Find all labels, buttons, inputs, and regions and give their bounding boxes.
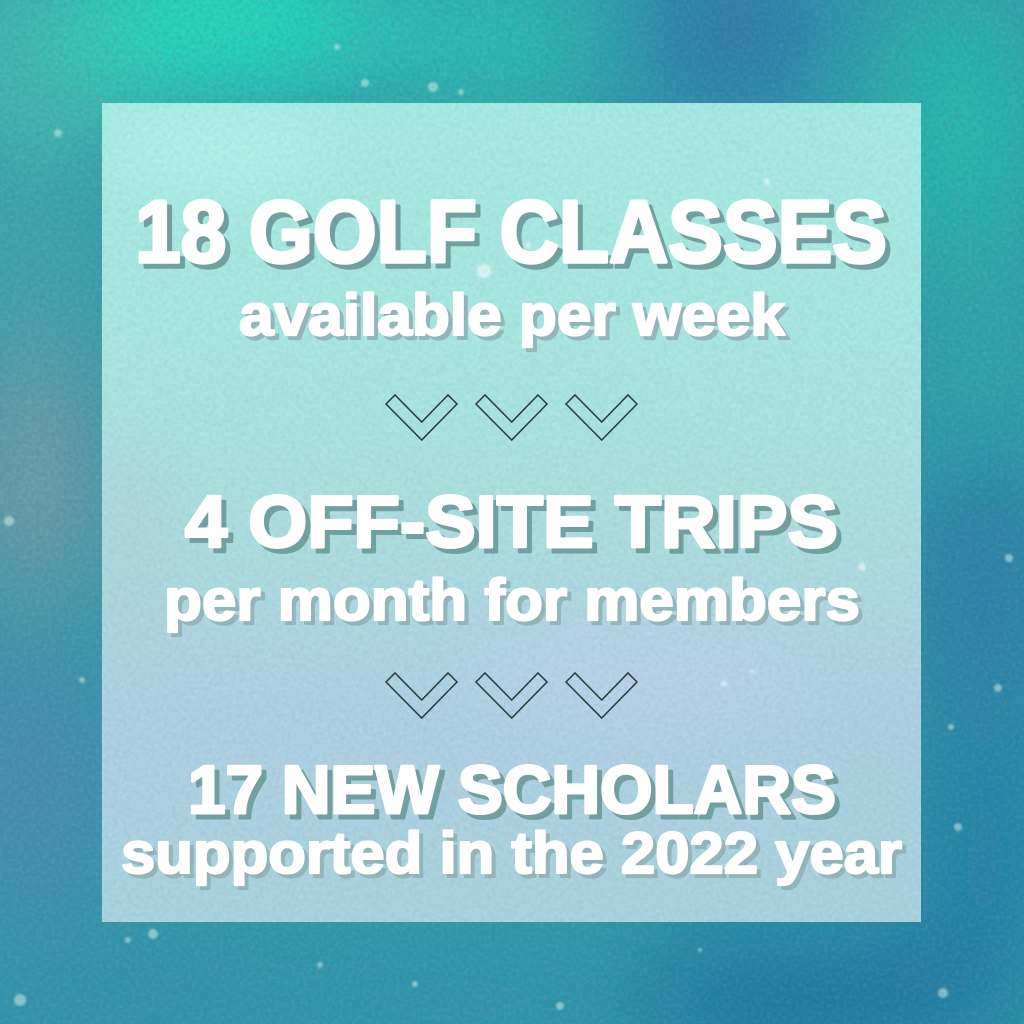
stat 1 headline: 18 GOLF CLASSES (135, 182, 887, 281)
chevron 5 (476, 673, 547, 718)
stat 2 subline: per month for members (164, 568, 860, 633)
panel speckles (477, 179, 866, 687)
chevron 3 (566, 395, 637, 440)
chevron 1 (386, 395, 457, 440)
arrows row 2 (386, 673, 637, 718)
stat 3 subline: supported in the 2022 year (121, 821, 902, 886)
stat 3: new scholars (121, 752, 902, 886)
arrows row 1 (386, 395, 637, 440)
stat 2 headline: 4 OFF-SITE TRIPS (185, 482, 838, 563)
stat 1: golf classes (135, 182, 887, 348)
stat 1 subline: available per week (239, 283, 786, 348)
chevron 4 (386, 673, 457, 718)
translucent panel (90, 103, 930, 922)
chevron 2 (476, 395, 547, 440)
stat 3 headline: 17 NEW SCHOLARS (188, 752, 836, 828)
chevron 6 (566, 673, 637, 718)
stat 2: off-site trips (164, 482, 860, 633)
